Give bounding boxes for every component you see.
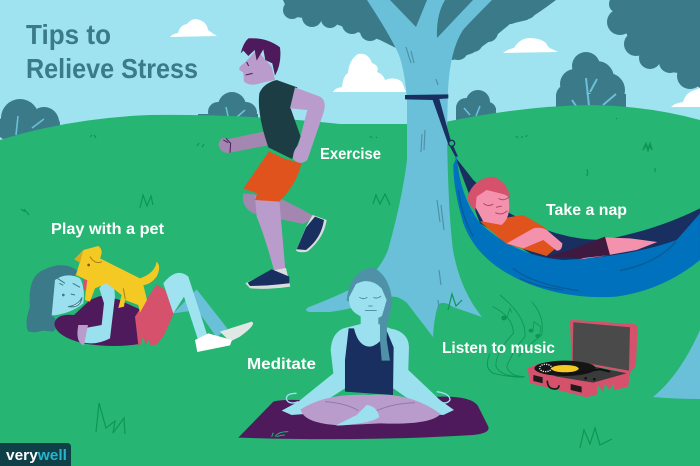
lid — [570, 320, 638, 373]
hair — [468, 177, 510, 211]
back shoe — [296, 215, 327, 252]
lower right tree root — [653, 330, 700, 399]
shorts — [243, 151, 301, 202]
cuff — [77, 325, 88, 345]
hair — [347, 267, 392, 361]
logo: verywell: verywell — [6, 447, 67, 464]
head — [239, 50, 275, 85]
head — [473, 187, 509, 225]
title: Relieve Stress — [26, 53, 198, 84]
title — [26, 19, 198, 84]
far shoe — [220, 322, 253, 342]
base — [528, 363, 630, 397]
clouds — [170, 19, 700, 107]
dog — [76, 246, 159, 313]
label: listen to music: Listen to music — [442, 340, 555, 357]
top right tree foliage — [607, 0, 700, 89]
face marks — [57, 278, 80, 295]
Hammock with sleeping man — [405, 94, 700, 297]
slots and handle — [533, 375, 582, 393]
back leg — [243, 193, 315, 224]
deck — [535, 362, 627, 383]
hair — [27, 265, 77, 332]
notes — [502, 308, 541, 338]
knobs — [584, 377, 587, 380]
tank top — [345, 328, 394, 395]
legs — [301, 395, 441, 425]
near leg — [163, 273, 208, 341]
dog ear and eye — [74, 250, 83, 263]
foot — [337, 405, 379, 426]
label: exercise: Exercise — [320, 146, 381, 163]
bush branches — [16, 78, 616, 135]
Meditating woman — [238, 267, 489, 439]
shirt — [480, 215, 562, 256]
back arm and fist — [218, 131, 270, 153]
background bushes — [0, 52, 626, 140]
arm — [83, 282, 115, 343]
shorts — [547, 237, 610, 258]
braid — [380, 317, 390, 361]
front arm — [290, 87, 325, 163]
legs — [580, 237, 657, 259]
hammock folds — [458, 190, 676, 291]
front leg — [255, 197, 285, 273]
yoga mat — [238, 397, 489, 439]
near shoe — [195, 333, 232, 352]
arm — [507, 228, 562, 251]
label: play with a pet: Play with a pet — [51, 221, 164, 238]
face marks — [483, 197, 509, 214]
face marks — [359, 296, 381, 311]
grass tufts — [21, 118, 655, 448]
body top — [54, 296, 142, 346]
label: meditate: Meditate — [247, 356, 316, 373]
far leg — [173, 289, 227, 337]
front shoe — [245, 268, 290, 289]
hills — [0, 105, 700, 466]
label: take a nap: Take a nap — [546, 202, 627, 219]
main tree foliage — [283, 0, 556, 60]
trunk bark marks — [406, 47, 444, 309]
tree belt and rope — [405, 94, 458, 157]
hammock body — [453, 157, 700, 297]
face — [52, 275, 84, 316]
shoulders and arms — [282, 315, 454, 415]
logo: verywell — [0, 443, 71, 466]
music waves — [487, 295, 542, 377]
hair — [241, 38, 280, 76]
Record player and music — [487, 295, 638, 397]
face marks — [246, 62, 253, 75]
hand circles — [286, 392, 450, 403]
record — [534, 361, 596, 376]
face — [349, 281, 387, 319]
Woman with dog: play with a pet — [27, 246, 253, 352]
torso shirt — [259, 80, 301, 159]
title: Tips to — [26, 19, 111, 50]
shorts — [135, 284, 179, 345]
hammock interior — [455, 157, 700, 263]
Runner figure: exercise — [218, 38, 327, 289]
main tree trunk — [306, 0, 492, 337]
